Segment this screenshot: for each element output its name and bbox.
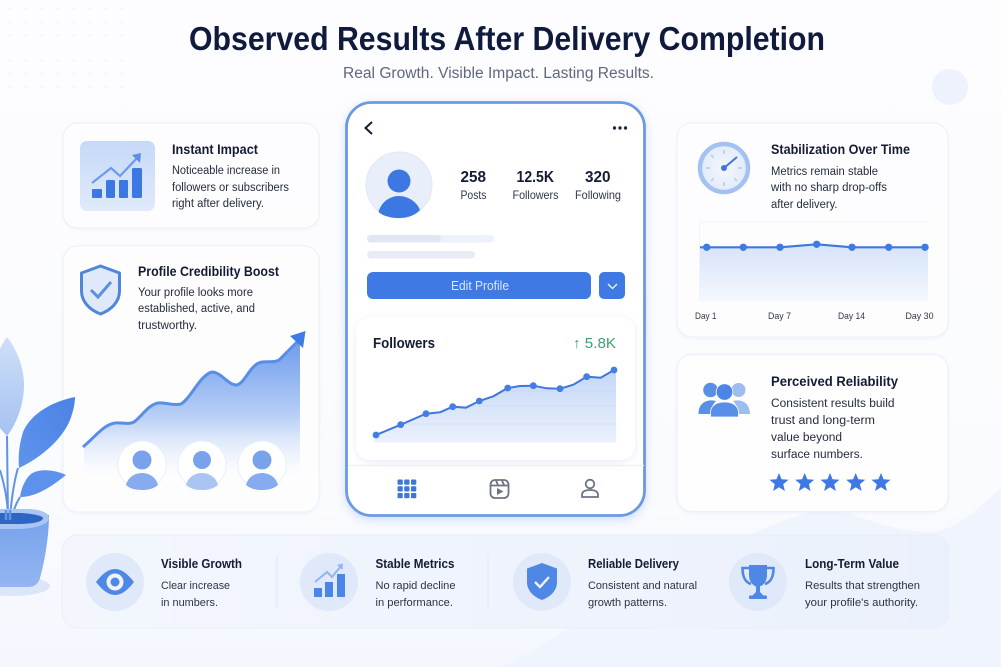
icon: growth chart <box>80 141 155 211</box>
item text: Reliable Delivery <box>588 557 679 571</box>
icon: people group <box>698 383 750 417</box>
stat: posts <box>460 169 486 202</box>
item text: Consistent and natural <box>588 580 697 592</box>
axis labels: Day 1 <box>695 311 716 322</box>
axis labels: Day 14 <box>838 311 865 322</box>
text block: Metrics remain stable <box>771 166 878 178</box>
heading: Perceived Reliability <box>771 374 898 389</box>
item: visible growth <box>86 553 242 611</box>
stat: followers: Followers <box>512 188 558 202</box>
growth value: ↑ 5.8K <box>573 336 616 352</box>
text block <box>771 398 894 461</box>
text block: Consistent results build <box>771 398 894 410</box>
stat: followers <box>512 169 558 202</box>
item text <box>376 557 456 609</box>
text block: with no sharp drop-offs <box>770 182 887 194</box>
icon: shield check <box>513 553 571 611</box>
text block: trust and long-term <box>771 415 875 427</box>
item text: your profile's authority. <box>805 597 918 609</box>
item text <box>161 557 242 609</box>
panel: profile credibility boost <box>63 246 319 512</box>
followers line chart <box>373 367 617 442</box>
stat: following: Following <box>575 188 621 202</box>
heading: Profile Credibility Boost <box>138 264 279 279</box>
edit profile button <box>367 272 591 299</box>
item text: in numbers. <box>161 597 218 609</box>
stat: following <box>575 169 621 202</box>
bio placeholder lines <box>367 235 494 258</box>
avatar 1 <box>118 441 166 490</box>
panel: bottom summary strip <box>62 535 949 628</box>
item text <box>588 557 697 609</box>
card heading: Followers <box>373 336 435 352</box>
text block: followers or subscribers <box>172 182 289 194</box>
icon: bars <box>300 553 358 611</box>
text block: established, active, and <box>138 303 255 315</box>
icon: grid tab <box>398 480 416 498</box>
panel: stabilization over time <box>677 123 948 337</box>
axis labels: Day 7 <box>768 311 791 322</box>
followers card <box>356 317 635 460</box>
avatar 3 <box>238 441 286 490</box>
title: Observed Results After Delivery Completion <box>189 21 825 58</box>
item text: Long-Term Value <box>805 557 899 571</box>
icon: five stars <box>770 473 890 491</box>
icon: back chevron <box>366 122 372 134</box>
item text: Stable Metrics <box>376 557 455 571</box>
text block: surface numbers. <box>771 449 863 461</box>
icon: profile tab <box>582 480 598 497</box>
icon: eye <box>86 553 144 611</box>
item text: Clear increase <box>161 580 230 592</box>
text block: right after delivery. <box>172 198 264 210</box>
dropdown button <box>599 272 625 299</box>
axis labels <box>695 311 934 322</box>
heading: Stabilization Over Time <box>771 142 910 157</box>
heading: Instant Impact <box>172 142 258 157</box>
text block: Your profile looks more <box>138 287 253 299</box>
stability line chart <box>695 222 934 322</box>
item text: growth patterns. <box>588 597 667 609</box>
icon: reels tab <box>490 480 508 498</box>
text block: value beyond <box>771 432 842 444</box>
panel: phone mockup <box>346 102 644 516</box>
stat: followers: 12.5K <box>516 169 554 186</box>
subtitle: Real Growth. Visible Impact. Lasting Results. <box>343 65 654 82</box>
item: long-term value <box>729 553 920 611</box>
item: reliable delivery <box>513 553 697 611</box>
panel: perceived reliability <box>677 354 948 512</box>
decorative plant <box>0 337 75 596</box>
panel: instant impact <box>63 123 319 228</box>
text block: Noticeable increase in <box>172 165 280 177</box>
item text: Results that strengthen <box>805 580 920 592</box>
text block <box>138 287 255 332</box>
icon: trophy <box>729 553 787 611</box>
edit profile button: Edit Profile <box>451 279 509 293</box>
axis labels: Day 30 <box>906 311 934 322</box>
profile avatar <box>366 152 432 218</box>
text block: trustworthy. <box>138 320 197 332</box>
item text: No rapid decline <box>376 580 456 592</box>
text block <box>172 165 289 210</box>
icon: gauge clock <box>700 144 748 192</box>
stat: following: 320 <box>585 169 611 186</box>
icon: shield <box>82 266 120 314</box>
stat: posts: 258 <box>460 169 486 186</box>
item text: Visible Growth <box>161 557 242 571</box>
bottom nav divider <box>348 464 644 466</box>
item text: in performance. <box>376 597 453 609</box>
icon: more menu <box>613 126 627 130</box>
text block: after delivery. <box>771 199 838 211</box>
stat: posts: Posts <box>460 188 486 202</box>
area chart with arrow <box>83 331 306 490</box>
text block <box>770 166 887 211</box>
avatar 2 <box>178 441 226 490</box>
item: stable metrics <box>300 553 456 611</box>
item text <box>805 557 920 609</box>
